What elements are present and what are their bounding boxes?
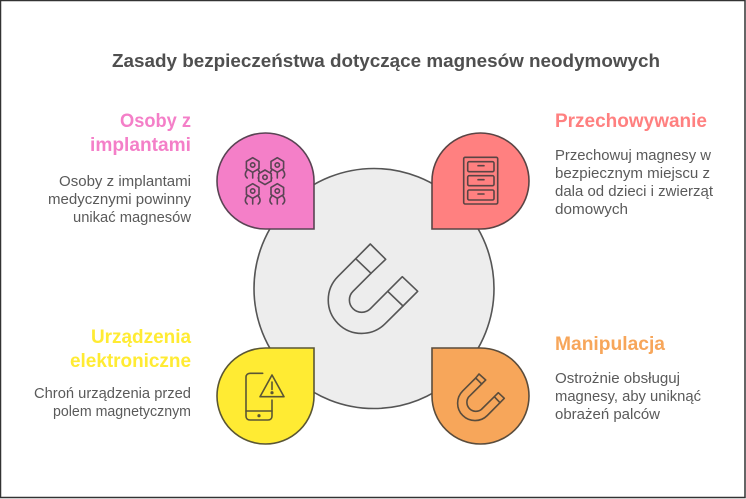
text block: handling: magnesy, aby uniknąć xyxy=(555,389,701,405)
text block: storage: domowych xyxy=(555,202,628,218)
central circle xyxy=(254,168,494,408)
panel: electronics drop xyxy=(217,348,314,444)
text block: storage xyxy=(555,111,713,218)
text block: storage: Przechowuj magnesy w xyxy=(555,148,712,164)
text block: electronics xyxy=(34,327,191,420)
panel: implants drop xyxy=(217,133,314,229)
text block: implants xyxy=(48,111,192,226)
icon: central magnet xyxy=(328,244,418,333)
text block: implants: Osoby z xyxy=(120,111,191,132)
text block: electronics: Chroń urządzenia przed xyxy=(34,386,191,402)
text block: electronics: elektroniczne xyxy=(70,351,191,372)
text block: implants: implantami xyxy=(90,135,191,156)
panel: handling drop xyxy=(432,348,529,444)
icon: cabinet xyxy=(464,157,498,204)
text block: implants: unikać magnesów xyxy=(73,210,192,226)
text block: electronics: Urządzenia xyxy=(91,327,191,348)
icon: phone warning xyxy=(246,373,284,420)
title: Zasady bezpieczeństwa dotyczące magnesów neodymowych xyxy=(112,51,660,71)
text block: handling: Manipulacja xyxy=(555,334,665,355)
text block: handling: obrażeń palców xyxy=(555,407,661,423)
panel: storage drop xyxy=(432,133,529,229)
text block: storage: dala od dzieci i zwierząt xyxy=(555,184,713,200)
text block: handling xyxy=(555,334,701,423)
text block: implants: Osoby z implantami xyxy=(59,174,191,190)
text block: storage: bezpiecznym miejscu z xyxy=(555,166,710,182)
text block: handling: Ostrożnie obsługuj xyxy=(555,371,680,387)
text block: implants: medycznymi powinny xyxy=(48,192,192,208)
icon: implants xyxy=(245,158,285,204)
text block: storage: Przechowywanie xyxy=(555,111,707,132)
text block: electronics: polem magnetycznym xyxy=(53,404,191,420)
icon: small magnet xyxy=(458,374,504,421)
